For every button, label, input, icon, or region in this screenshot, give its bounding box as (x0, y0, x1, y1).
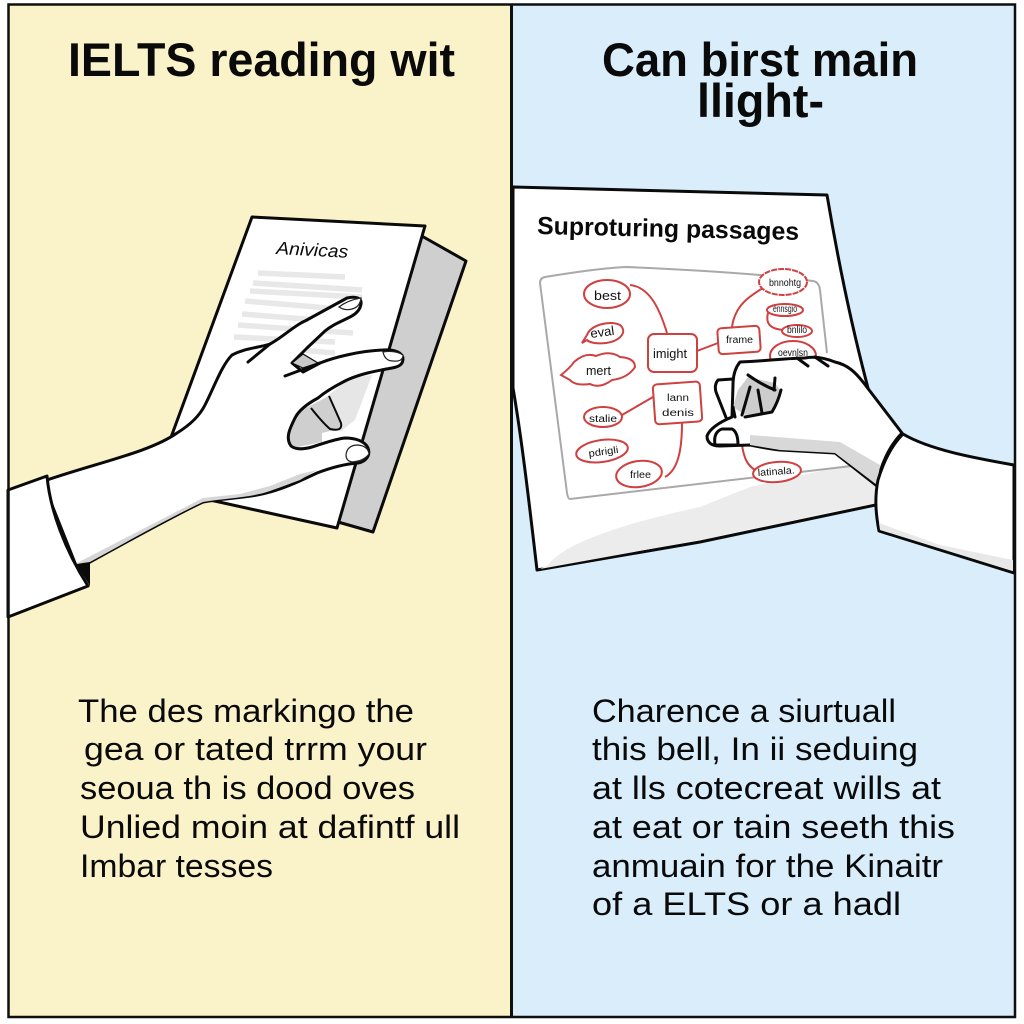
left body text: Unlied moin at dafintf ull (80, 809, 460, 845)
cuff wedge (76, 562, 90, 586)
shirt cuff (8, 476, 88, 617)
node: frame box: frame (726, 335, 753, 346)
right body text (592, 693, 955, 922)
left body text: Imbar tesses (80, 848, 273, 884)
node: best: best (594, 288, 621, 303)
hand shadow (750, 435, 880, 485)
right body text: Charence a siurtuall (592, 693, 896, 729)
right body text: this bell, In ii seduing (592, 731, 918, 767)
node: top right cloud (759, 269, 807, 295)
node: small upper (767, 304, 803, 316)
node: pdrigli (575, 436, 629, 466)
left finger (715, 379, 740, 420)
node: mert cloud: mert (586, 363, 611, 378)
right body text: at eat or tain seeth this (592, 809, 955, 845)
middle finger base line (285, 363, 320, 376)
shadow under hand on page (325, 375, 372, 432)
node: best (584, 280, 630, 308)
folded finger (311, 396, 341, 430)
left panel background (8, 4, 511, 1017)
node: insight box: imight (653, 346, 687, 361)
left heading: IELTS reading wit (68, 33, 455, 86)
document back cover (338, 235, 466, 532)
right heading: llight- (697, 74, 824, 127)
illustration: hand on document (8, 217, 466, 617)
hand underside shadow (77, 470, 317, 563)
node: lann denis box: lann (667, 393, 689, 404)
node: behind hand (770, 341, 816, 371)
hand (47, 297, 403, 568)
panel: right blue column (511, 4, 1015, 1017)
right body text: of a ELTS or a hadl (592, 886, 901, 922)
middle nail (383, 351, 403, 361)
right heading (602, 33, 918, 127)
paper sheet (513, 187, 885, 570)
knuckle lines (733, 357, 828, 417)
illustration: right hand (707, 357, 1014, 573)
document text lines (234, 273, 362, 353)
left body text: seoua th is dood oves (80, 770, 415, 806)
node: bottom right (752, 460, 802, 484)
document front page (170, 217, 425, 528)
node: lann denis box: denis (662, 408, 694, 419)
node: mert cloud (561, 353, 635, 386)
node: stalie: stalie (589, 414, 618, 425)
thumb nail (346, 445, 369, 462)
right heading: Can birst main (602, 33, 918, 86)
right panel background (511, 4, 1015, 1017)
node: frlee (614, 458, 664, 490)
index nail (339, 298, 361, 310)
document title: Anivicas (275, 238, 349, 262)
node: frlee: frlee (630, 470, 651, 481)
node: pdrigli: pdrigli (588, 445, 619, 460)
left body text: The des markingo the (78, 693, 414, 729)
left body text (78, 693, 460, 884)
gap between index and middle (292, 354, 318, 368)
node: oval: eval (589, 323, 615, 341)
page heading: Suproturing passages (537, 212, 799, 246)
right body text: at lls cotecreat wills at (592, 770, 941, 806)
sleeve shading (879, 523, 1013, 571)
mind map links (622, 285, 783, 477)
thumb nail (715, 429, 738, 445)
node: stalie (584, 407, 622, 427)
panel: left yellow column (8, 4, 511, 1017)
right body text: anmuain for the Kinaitr (592, 848, 943, 884)
index knuckle line (248, 344, 270, 362)
paper fold shading (540, 465, 877, 569)
node: frame box (717, 326, 761, 354)
illustration: mind map page (513, 187, 885, 570)
node: bottom right: latinala. (757, 465, 795, 479)
node: lann denis box (653, 381, 702, 425)
node: oval (582, 323, 623, 343)
node: small upper: ennsgio (773, 304, 797, 315)
gap shadow between fingers (288, 397, 342, 448)
diagram frame (540, 267, 860, 499)
knuckle grey patch (733, 377, 780, 415)
node: top right cloud: bnnohtg (769, 278, 801, 289)
left body text: gea or tated trrm your (84, 731, 427, 767)
node: behind hand: oevnlsn (778, 348, 808, 359)
sleeve cuff (876, 434, 1014, 573)
hand (707, 357, 902, 486)
node: insight box (648, 334, 697, 372)
node: small lower: bnlilo (787, 325, 807, 336)
